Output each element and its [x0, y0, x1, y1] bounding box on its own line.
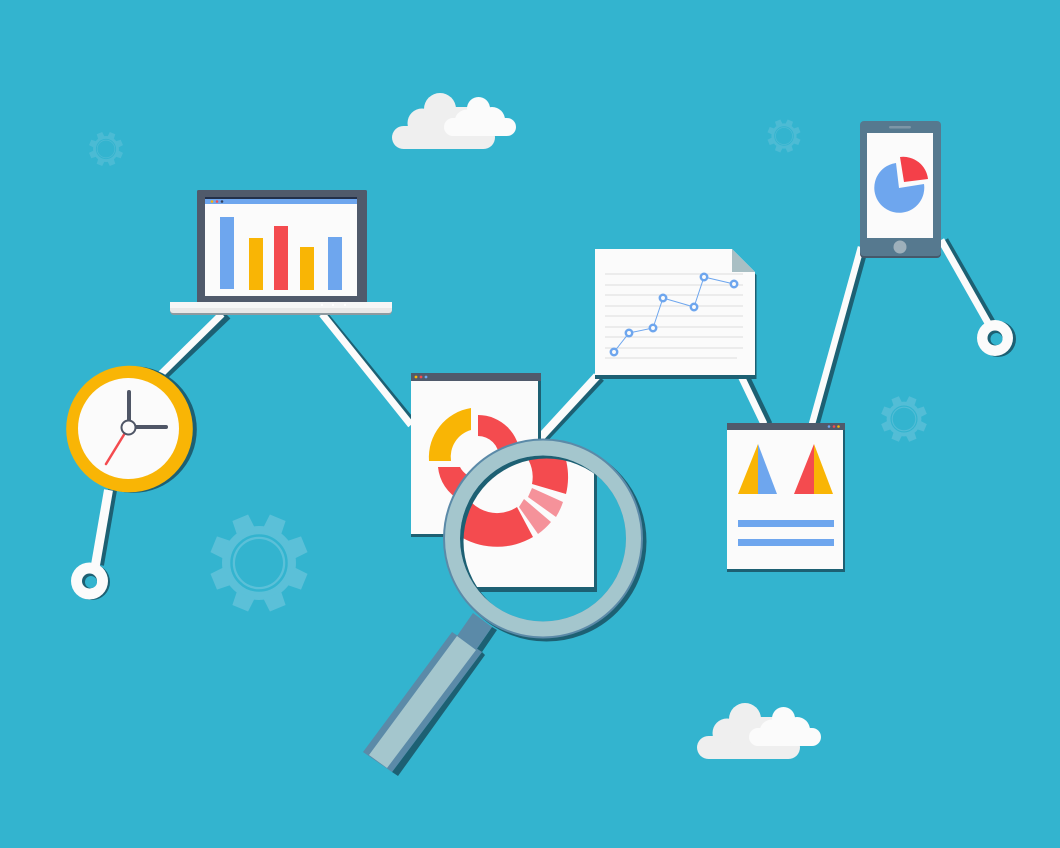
icon: cloud top: [392, 93, 516, 149]
connector line shadows: [100, 240, 992, 565]
line chart: [611, 274, 737, 355]
handle: [363, 613, 497, 776]
icon: large gear: [210, 514, 308, 612]
document with triangle charts: [727, 423, 845, 572]
browser dots: [415, 376, 427, 378]
icon: small gear top left: [89, 132, 123, 166]
smartphone with pie chart: [860, 121, 941, 258]
document with donut chart: [411, 373, 541, 537]
page fold: [732, 249, 755, 272]
browser dots: [828, 425, 840, 428]
magnified red segment top: [528, 458, 568, 494]
bar chart: [220, 217, 342, 290]
icon: clock: [66, 366, 197, 493]
donut segment red bottom: [438, 467, 500, 505]
connector lines: [96, 240, 988, 565]
pie chart blue: [874, 163, 924, 213]
end node left: [71, 562, 110, 600]
magnifying glass: [363, 447, 638, 776]
lens ring: [452, 447, 634, 630]
ruled lines: [605, 274, 743, 358]
lens ring shadow: [455, 450, 638, 633]
home button: [894, 240, 906, 254]
browser dots: [211, 200, 223, 203]
infographic illustration: [66, 93, 1016, 776]
icon: medium gear right: [881, 396, 927, 442]
magnified red segment bottom: [464, 504, 533, 547]
pie chart red: [900, 157, 928, 182]
icon: cloud bottom: [697, 703, 821, 759]
magnified pink segment one: [528, 488, 563, 517]
donut segment yellow: [429, 408, 471, 461]
end node right: [977, 320, 1016, 357]
magnified view of the document: [464, 458, 597, 592]
donut segment red top: [478, 415, 520, 457]
laptop with bar chart: [170, 190, 392, 315]
laptop base: [170, 302, 392, 315]
speaker: [889, 126, 911, 128]
triangle chart right: [794, 444, 833, 494]
document with line chart: [595, 249, 756, 379]
magnified pink segment two: [519, 499, 551, 534]
icon: small gear top right: [767, 119, 801, 153]
text bars: [738, 520, 834, 546]
triangle chart left: [738, 444, 777, 494]
